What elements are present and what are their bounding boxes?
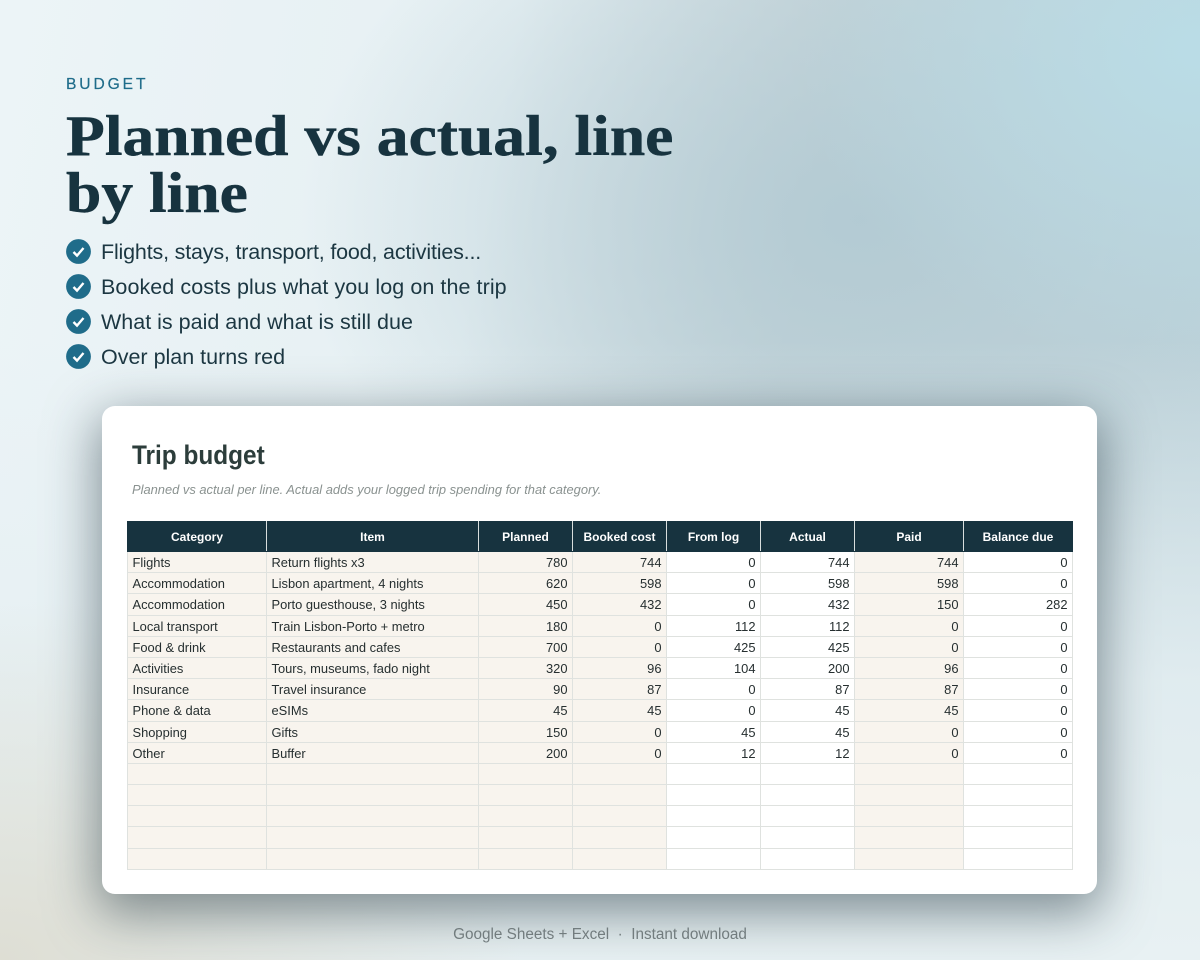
budget table: Item — [360, 530, 385, 544]
budget table: 12 — [741, 746, 756, 761]
budget table: 700 — [546, 640, 568, 655]
title: Planned vs actual, line — [66, 105, 673, 168]
budget table: 598 — [640, 576, 662, 591]
budget table: Flights — [132, 555, 170, 570]
budget table: Insurance — [132, 682, 189, 697]
budget table: 150 — [937, 597, 958, 612]
budget table: 598 — [828, 576, 850, 591]
budget table: Lisbon apartment, 4 nights — [272, 576, 423, 591]
budget table: 96 — [647, 661, 662, 676]
budget table: Train Lisbon-Porto + metro — [272, 619, 425, 634]
budget table: Other — [132, 746, 165, 761]
budget table: 780 — [546, 555, 568, 570]
budget table: 150 — [546, 725, 568, 740]
budget table: 0 — [1060, 682, 1068, 697]
budget table: 45 — [835, 703, 850, 718]
budget table: 0 — [1060, 725, 1068, 740]
budget table: Food & drink — [132, 640, 206, 655]
footer note: Google Sheets + Excel · Instant download — [453, 926, 747, 943]
budget table: 0 — [1060, 661, 1068, 676]
budget table: 0 — [1060, 746, 1068, 761]
budget table: 0 — [951, 619, 958, 634]
bullet: booked costs: Booked costs plus what you log on the trip — [101, 275, 507, 299]
budget table: Category — [171, 530, 223, 544]
budget table: Buffer — [272, 746, 306, 761]
budget table: 425 — [734, 640, 756, 655]
budget table: Travel insurance — [272, 682, 366, 697]
budget table: Planned — [502, 530, 549, 544]
budget table: 0 — [1060, 703, 1068, 718]
budget table: 0 — [1060, 619, 1068, 634]
budget table: 0 — [748, 576, 756, 591]
panel: spreadsheet card — [102, 406, 1097, 894]
budget table: 598 — [937, 576, 958, 591]
budget table: 432 — [640, 597, 662, 612]
budget table: Shopping — [132, 725, 187, 740]
budget table: 45 — [835, 725, 850, 740]
budget table: Paid — [896, 530, 922, 544]
budget table: 0 — [654, 725, 662, 740]
budget table: 112 — [829, 619, 850, 634]
budget table: 200 — [546, 746, 568, 761]
budget table: 744 — [937, 555, 958, 570]
budget table: 45 — [553, 703, 568, 718]
budget table: From log — [688, 530, 739, 544]
budget table: 0 — [748, 597, 756, 612]
card heading: Trip budget — [132, 440, 265, 470]
budget table: Phone & data — [132, 703, 211, 718]
budget table: Restaurants and cafes — [272, 640, 400, 655]
budget table: Balance due — [983, 530, 1053, 544]
budget table: 90 — [553, 682, 568, 697]
budget table: eSIMs — [272, 703, 308, 718]
budget table: Return flights x3 — [272, 555, 365, 570]
budget table: 0 — [654, 640, 662, 655]
budget table: 0 — [654, 619, 662, 634]
title: by line — [66, 162, 248, 225]
budget table: 744 — [828, 555, 850, 570]
bullet: paid and due: What is paid and what is still due — [101, 310, 413, 334]
budget table: 0 — [748, 555, 756, 570]
budget table: Accommodation — [132, 576, 225, 591]
budget table: Local transport — [132, 619, 218, 634]
budget table: 0 — [951, 746, 958, 761]
budget table: 0 — [951, 725, 958, 740]
budget table: Tours, museums, fado night — [272, 661, 430, 676]
budget table: 200 — [828, 661, 850, 676]
budget table: 45 — [944, 703, 958, 718]
budget table: Activities — [132, 661, 183, 676]
budget table: 96 — [944, 661, 958, 676]
budget table: 45 — [741, 725, 756, 740]
bullet: over plan: Over plan turns red — [101, 345, 285, 369]
budget table — [127, 521, 1073, 870]
budget table: 425 — [828, 640, 850, 655]
eyebrow label: BUDGET — [66, 76, 148, 93]
budget table: Booked cost — [583, 530, 656, 544]
budget table: 320 — [546, 661, 568, 676]
budget table: 0 — [1060, 576, 1068, 591]
budget table: 744 — [640, 555, 662, 570]
budget table: 0 — [748, 703, 756, 718]
budget table: 87 — [647, 682, 662, 697]
budget table: 0 — [748, 682, 756, 697]
budget table: Actual — [789, 530, 826, 544]
budget table: Accommodation — [132, 597, 225, 612]
budget table: 282 — [1046, 597, 1068, 612]
budget table: 12 — [835, 746, 850, 761]
budget table: 0 — [1060, 555, 1068, 570]
budget table: 87 — [944, 682, 958, 697]
budget table: 87 — [835, 682, 850, 697]
budget table: 432 — [828, 597, 850, 612]
budget table: 104 — [734, 661, 756, 676]
card subtitle: Planned vs actual per line. Actual adds your logged trip spending for that category. — [132, 482, 601, 497]
budget table: 180 — [546, 619, 568, 634]
title — [66, 105, 673, 225]
budget table: 450 — [546, 597, 568, 612]
budget table: 45 — [647, 703, 662, 718]
budget table: 0 — [1060, 640, 1068, 655]
budget table: 0 — [951, 640, 958, 655]
bullet: flights: Flights, stays, transport, food, activities... — [101, 240, 481, 264]
budget table: 0 — [654, 746, 662, 761]
budget table: 112 — [735, 619, 756, 634]
budget table: 620 — [546, 576, 568, 591]
budget table: Porto guesthouse, 3 nights — [272, 597, 425, 612]
budget table: Gifts — [272, 725, 298, 740]
